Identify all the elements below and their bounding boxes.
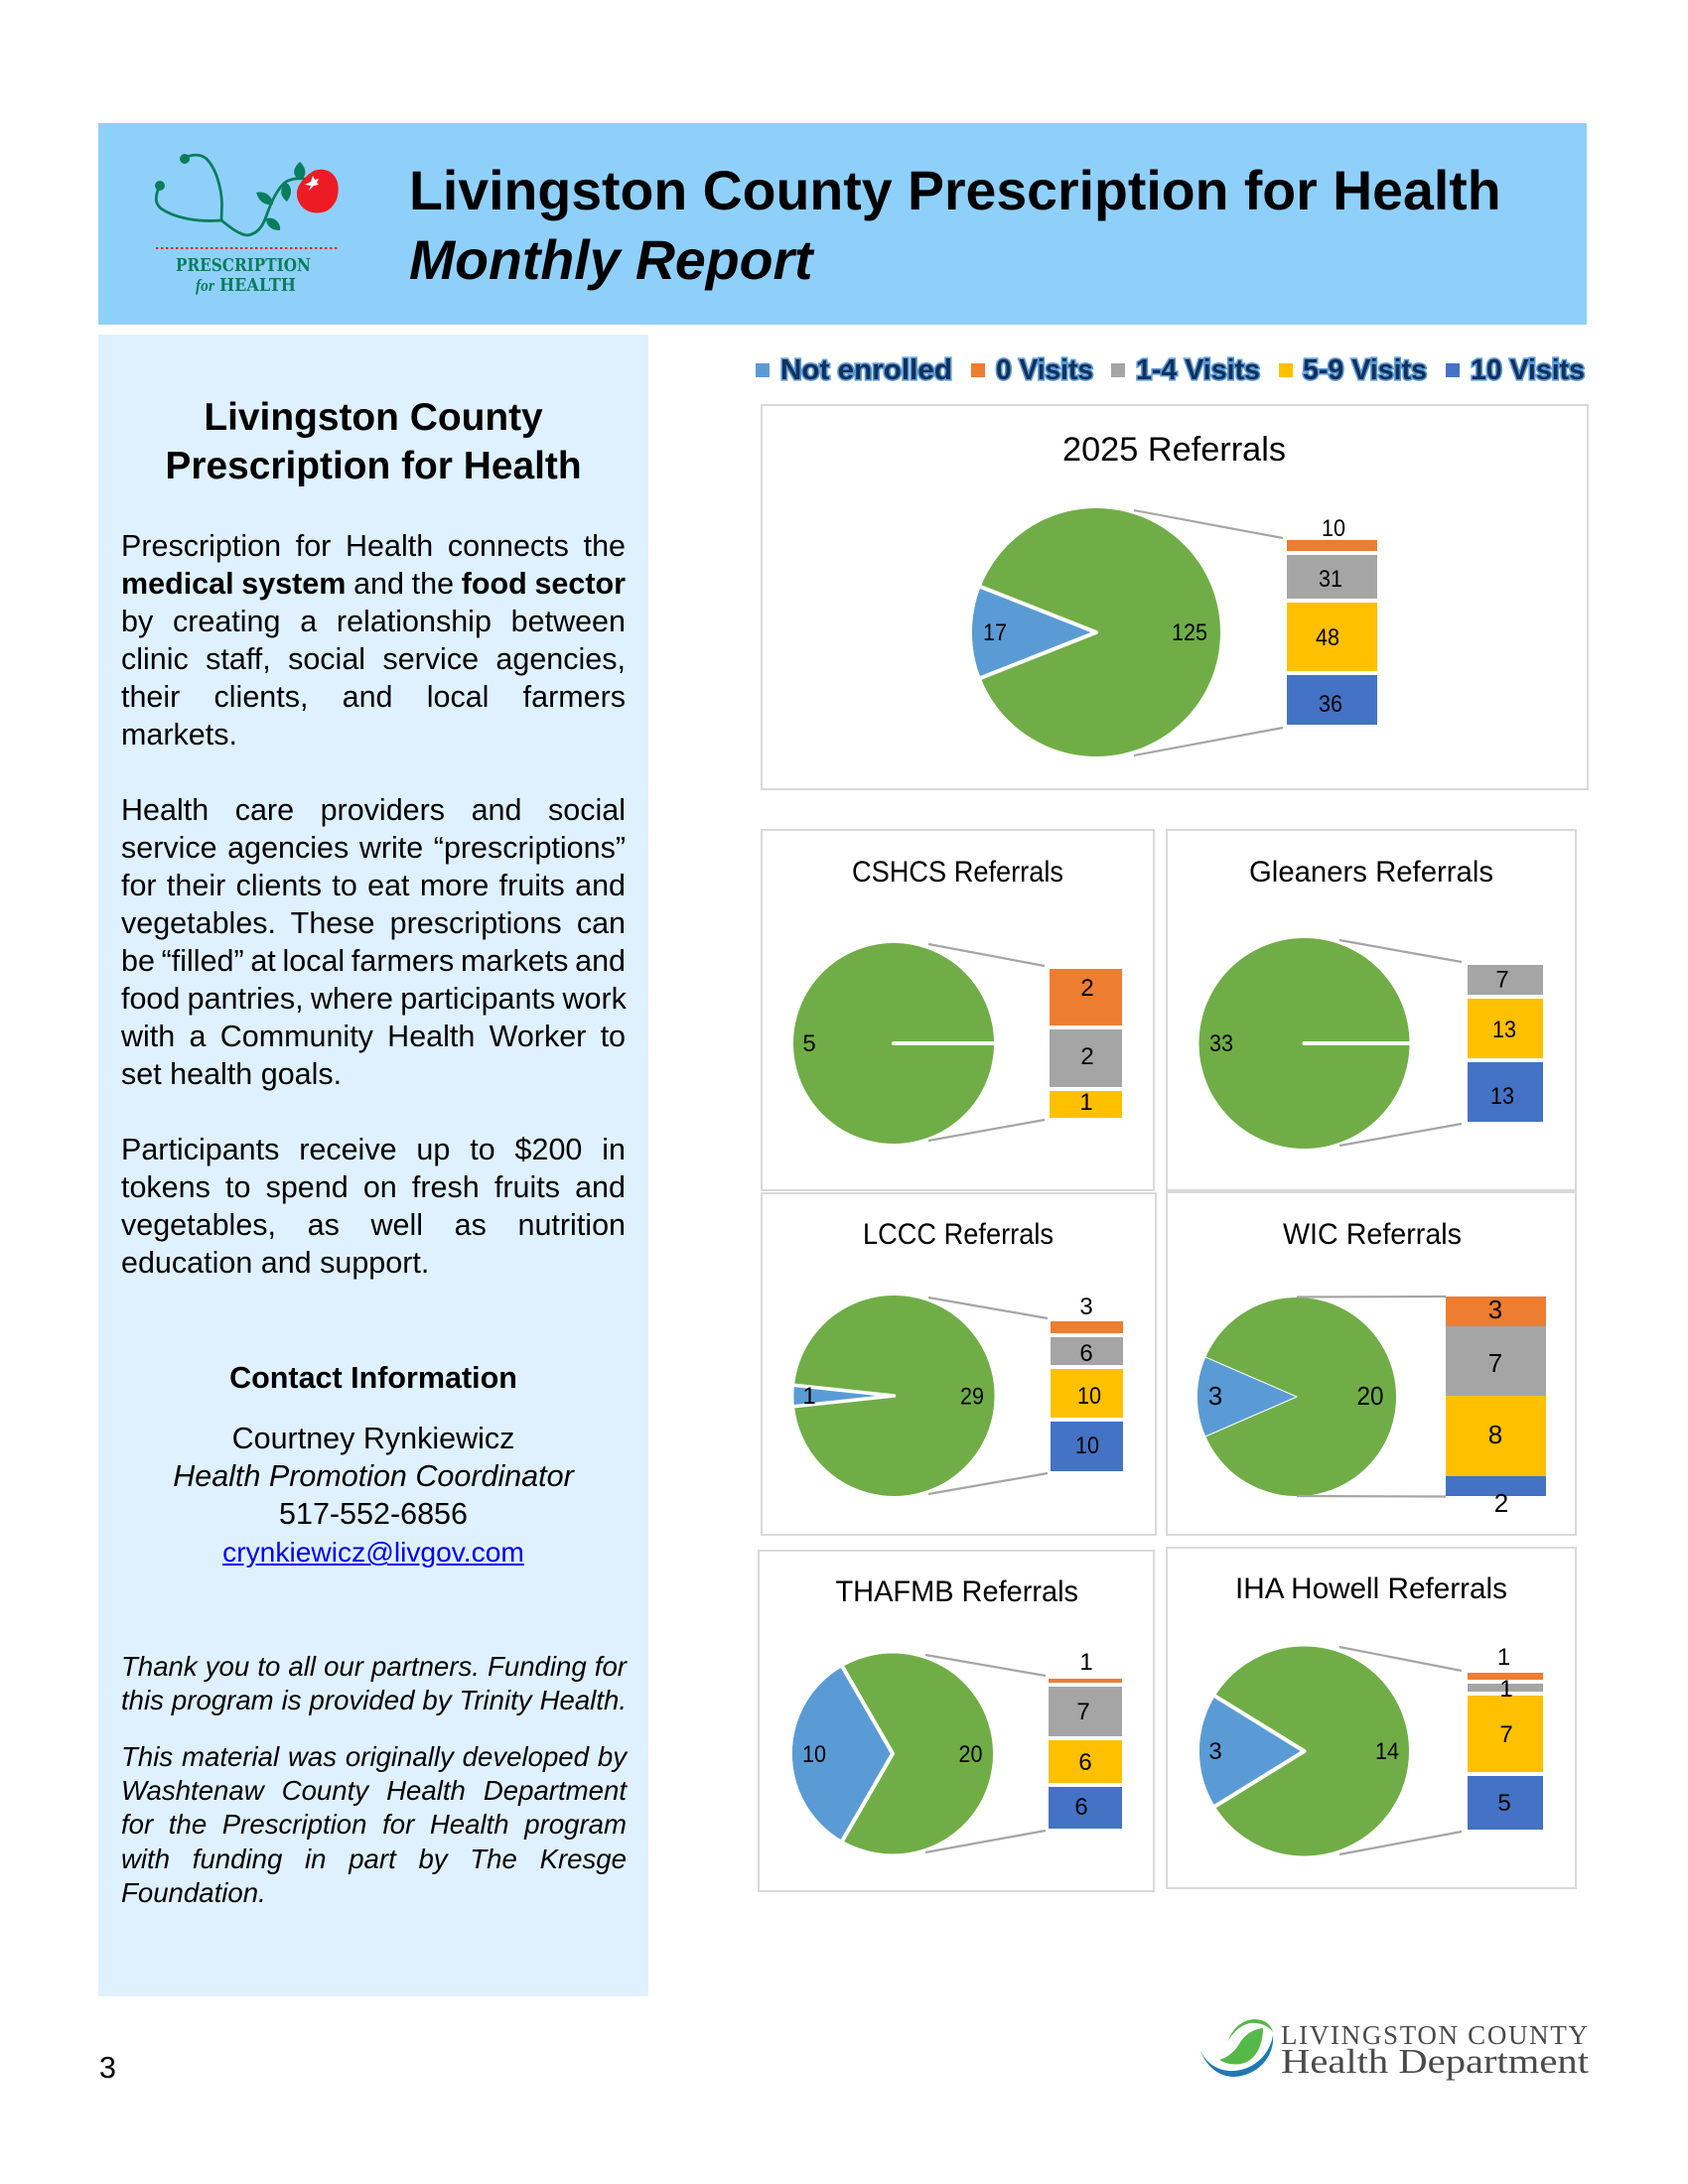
logo wordmark	[176, 255, 311, 296]
stacked bar: 10	[1077, 1383, 1101, 1410]
stacked bar	[1446, 1295, 1546, 1518]
chart title: THAFMB Referrals	[836, 1575, 1078, 1608]
panel: CSHCS Referrals chart	[761, 829, 1155, 1191]
text block: prescriptions paragraph: food pantries, where participants work	[121, 982, 627, 1016]
pie chart	[792, 1654, 993, 1854]
dotted rule	[156, 247, 338, 249]
panel: IHA Howell Referrals chart	[1166, 1547, 1577, 1889]
legend: 1-4 visits: 1-4 Visits	[1136, 354, 1260, 386]
pie chart: 14	[1375, 1738, 1399, 1765]
stacked bar: 1	[1079, 1649, 1093, 1676]
stacked bar: 7	[1076, 1699, 1090, 1725]
pie chart: 125	[1172, 619, 1207, 646]
stacked bar: 1	[1079, 1089, 1093, 1116]
contact details: Health Promotion Coordinator	[173, 1459, 574, 1493]
logo wordmark: HEALTH	[219, 275, 296, 296]
text block: tokens paragraph: vegetables, as well as nutrition	[121, 1208, 626, 1242]
text block: intro paragraph: their clients, and local farmers	[121, 680, 626, 714]
stacked bar: 31	[1319, 566, 1342, 593]
icon: leaf and swoosh	[1199, 2019, 1273, 2077]
stacked bar: 10	[1075, 1433, 1099, 1459]
pie chart: 29	[960, 1384, 984, 1411]
text block: funding thanks	[121, 1650, 628, 1715]
text block: prescriptions paragraph: set health goals.	[121, 1057, 342, 1091]
stacked bar	[1049, 1649, 1122, 1829]
pie chart: 1	[802, 1383, 816, 1410]
stacked bar	[1051, 1294, 1123, 1471]
chart title: IHA Howell Referrals	[1235, 1572, 1507, 1605]
pie chart: 20	[959, 1741, 983, 1768]
logo wordmark: for	[196, 276, 214, 295]
stacked bar: 13	[1492, 1017, 1516, 1043]
stacked bar	[1287, 515, 1377, 725]
stacked bar	[1468, 965, 1543, 1122]
text block: prescriptions paragraph: vegetables. These prescriptions can	[121, 906, 626, 940]
stacked bar: 7	[1499, 1721, 1513, 1748]
text block: tokens paragraph: education and support.	[121, 1246, 429, 1280]
pie chart: 5	[802, 1030, 816, 1057]
panel: Gleaners Referrals chart	[1166, 829, 1577, 1191]
pie chart: 17	[983, 619, 1007, 646]
contact details: crynkiewicz@livgov.com	[222, 1536, 524, 1568]
chart title: CSHCS Referrals	[852, 856, 1063, 888]
icon: stethoscope	[155, 154, 309, 235]
text block: intro paragraph: Prescription for Health connects the	[121, 529, 626, 563]
panel: 2025 Referrals chart	[761, 404, 1589, 790]
text block: prescriptions paragraph: for their clients to eat more fruits and	[121, 869, 626, 902]
chart title: WIC Referrals	[1283, 1218, 1462, 1251]
chart title: LCCC Referrals	[863, 1218, 1054, 1251]
text block: funding thanks: this program is provided by Trinity Health.	[121, 1685, 627, 1715]
legend: 5-9 visits: 5-9 Visits	[1303, 354, 1427, 386]
title: Monthly Report	[409, 229, 812, 291]
text block: intro paragraph: medical system and the food sector	[121, 567, 626, 601]
stacked bar: 7	[1495, 967, 1509, 993]
stacked bar: 3	[1079, 1294, 1093, 1320]
text block: material credit: for the Prescription for Health program	[121, 1809, 627, 1840]
text block: material credit: Foundation.	[121, 1877, 266, 1908]
stacked bar: 1	[1497, 1644, 1510, 1671]
text block: material credit: Washtenaw County Health Department	[121, 1775, 627, 1806]
legend	[756, 354, 1585, 386]
department name	[1281, 2020, 1589, 2081]
text block: material credit: This material was originally developed by	[121, 1741, 627, 1771]
pie chart	[1199, 1646, 1409, 1856]
legend: not enrolled: Not enrolled	[780, 354, 952, 386]
contact heading: Contact Information	[229, 1361, 517, 1395]
pie chart: 3	[1208, 1738, 1222, 1765]
department name: Health Department	[1281, 2042, 1589, 2081]
chart title: Gleaners Referrals	[1249, 856, 1493, 888]
connector lines	[928, 1297, 1048, 1494]
page number: 3	[99, 2051, 116, 2085]
text block: prescriptions paragraph	[121, 793, 627, 1091]
connector lines	[1297, 1297, 1446, 1497]
text block: intro paragraph	[121, 529, 626, 751]
stacked bar: 6	[1078, 1749, 1092, 1776]
panel: WIC Referrals chart	[1166, 1191, 1577, 1536]
text block: material credit	[121, 1741, 628, 1908]
text block: material credit: with funding in part by The Kresge	[121, 1843, 627, 1874]
title: Livingston County Prescription for Health	[409, 160, 1501, 221]
panel: THAFMB Referrals chart	[758, 1550, 1155, 1892]
connector lines	[1134, 510, 1283, 755]
sidebar heading: Livingston County	[204, 396, 543, 439]
connector lines	[1339, 940, 1462, 1146]
stacked bar	[1050, 969, 1122, 1118]
department name: LIVINGSTON COUNTY	[1281, 2020, 1588, 2050]
stacked bar: 3	[1488, 1295, 1502, 1324]
header banner	[98, 123, 1587, 325]
connector lines	[1339, 1647, 1462, 1854]
pie chart: 10	[802, 1741, 826, 1768]
logo: Prescription for Health	[155, 153, 339, 296]
pie chart	[793, 943, 997, 1144]
sidebar heading: Prescription for Health	[165, 445, 582, 487]
stacked bar: 6	[1079, 1340, 1093, 1367]
stacked bar: 1	[1499, 1676, 1513, 1703]
stacked bar: 10	[1322, 515, 1345, 542]
stacked bar: 2	[1494, 1488, 1508, 1518]
text block: prescriptions paragraph: service agencies write “prescriptions”	[121, 831, 626, 865]
pie chart	[791, 1296, 995, 1496]
stacked bar: 5	[1497, 1790, 1511, 1817]
contact details: Courtney Rynkiewicz	[232, 1422, 514, 1455]
text block: prescriptions paragraph: be “filled” at local farmers markets and	[121, 944, 626, 978]
connector lines	[928, 944, 1045, 1141]
stacked bar: 2	[1080, 975, 1094, 1002]
text block: tokens paragraph: Participants receive up to $200 in	[121, 1133, 626, 1166]
contact details: 517-552-6856	[279, 1497, 468, 1531]
connector lines	[925, 1655, 1046, 1852]
text block: intro paragraph: clinic staff, social service agencies,	[121, 642, 626, 676]
text block: prescriptions paragraph: with a Community Health Worker to	[121, 1020, 626, 1053]
text block: funding thanks: Thank you to all our partners. Funding for	[121, 1650, 627, 1682]
text block: prescriptions paragraph: Health care providers and social	[121, 793, 626, 827]
title	[409, 160, 1501, 291]
stacked bar	[1468, 1644, 1543, 1830]
stacked bar: 13	[1490, 1083, 1514, 1110]
stacked bar: 6	[1074, 1794, 1088, 1821]
icon: leaves	[256, 162, 305, 230]
pie chart: 3	[1208, 1381, 1222, 1411]
chart title: 2025 Referrals	[1062, 431, 1286, 469]
pie chart	[1199, 938, 1412, 1149]
stacked bar: 8	[1488, 1420, 1502, 1449]
pie chart: 33	[1209, 1030, 1233, 1057]
text block: intro paragraph: by creating a relationship between	[121, 605, 626, 638]
logo: Livingston County Health Department	[1199, 2019, 1589, 2081]
icon: tomato	[297, 170, 339, 212]
legend: 0 visits: 0 Visits	[996, 354, 1093, 386]
pie chart: 20	[1356, 1381, 1384, 1411]
sidebar heading	[165, 396, 582, 487]
stacked bar: 7	[1488, 1348, 1502, 1378]
stacked bar: 36	[1319, 691, 1342, 718]
text block: intro paragraph: markets.	[121, 718, 237, 751]
stacked bar: 2	[1080, 1043, 1094, 1070]
panel: left sidebar background	[98, 335, 648, 1996]
text block: tokens paragraph: tokens to spend on fresh fruits and	[121, 1170, 626, 1204]
text block: tokens paragraph	[121, 1133, 626, 1280]
legend: 10 visits: 10 Visits	[1471, 354, 1585, 386]
logo wordmark: PRESCRIPTION	[176, 255, 311, 276]
pie chart	[1197, 1297, 1396, 1496]
pie chart	[972, 508, 1220, 756]
panel: LCCC Referrals chart	[761, 1192, 1157, 1536]
stacked bar: 48	[1316, 624, 1339, 651]
contact details	[173, 1422, 575, 1568]
